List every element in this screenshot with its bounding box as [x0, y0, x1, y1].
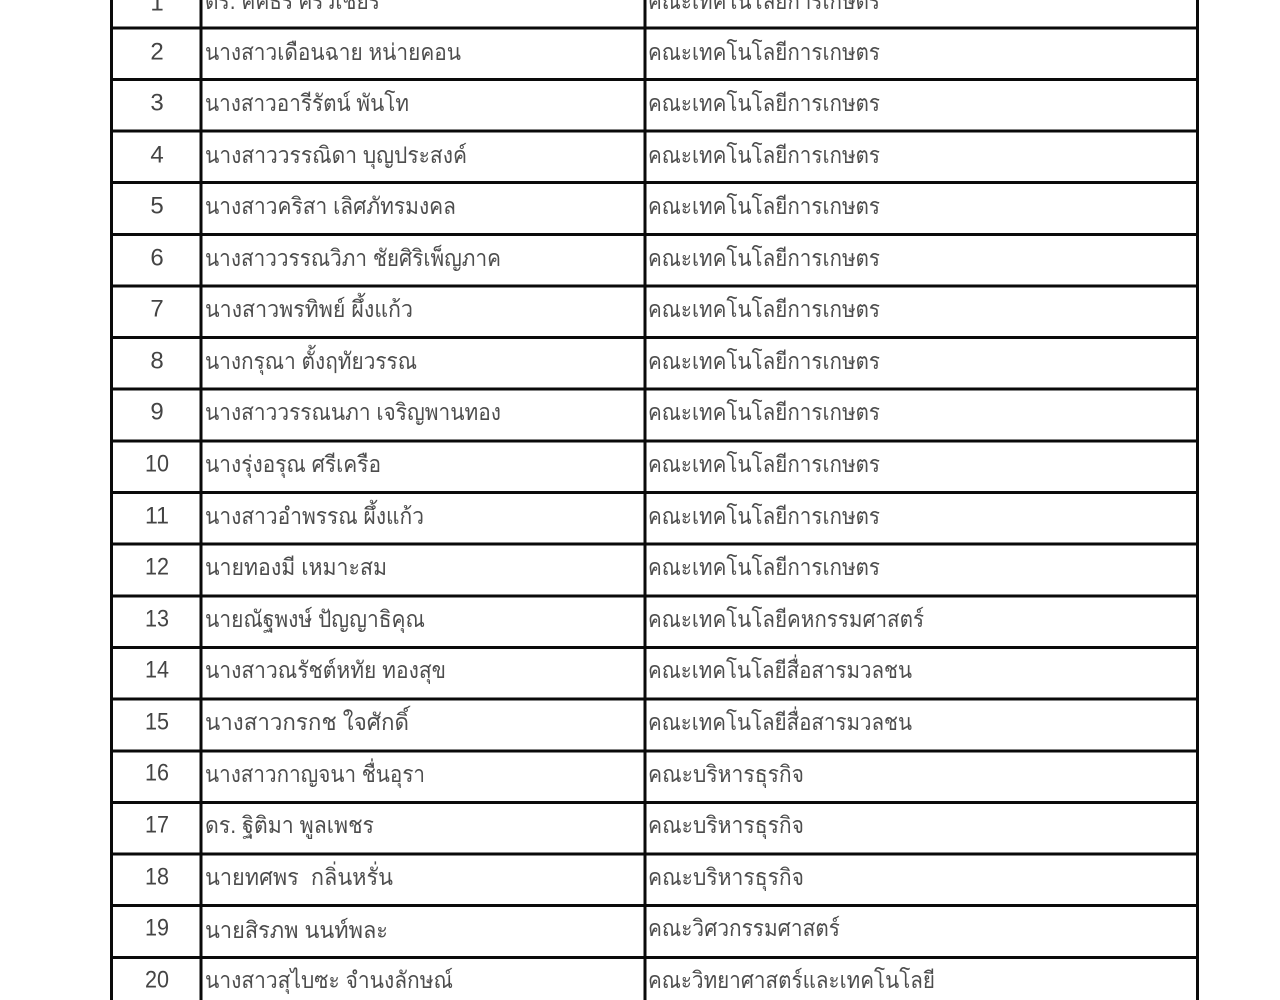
row 2: นางสาวเดือนฉาย หน่ายคอน — [205, 39, 461, 65]
row 7: 7 — [150, 296, 164, 322]
row 12: 12 — [145, 554, 169, 580]
row 13: 13 — [145, 606, 169, 632]
row 9: 9 — [150, 398, 164, 426]
row 17: คณะบริหารธุรกิจ — [648, 812, 804, 839]
row 14: นางสาวณรัชต์หทัย ทองสุข — [205, 657, 446, 684]
row 15 — [145, 705, 912, 736]
row 20 — [145, 966, 935, 994]
row 3: คณะเทคโนโลยีการเกษตร — [648, 90, 880, 116]
row 16: คณะบริหารธุรกิจ — [648, 761, 804, 788]
row 17: ดร. ฐิติมา พูลเพชร — [205, 812, 374, 839]
row 14: 14 — [145, 656, 169, 684]
row 5 — [150, 192, 880, 220]
row 18: คณะบริหารธุรกิจ — [648, 864, 804, 891]
row 5: คณะเทคโนโลยีการเกษตร — [648, 193, 880, 219]
row 6: นางสาววรรณวิภา ชัยศิริเพ็ญภาค — [205, 243, 501, 271]
row 11 — [145, 500, 880, 530]
row 10: 10 — [145, 450, 169, 478]
row 9: คณะเทคโนโลยีการเกษตร — [648, 399, 880, 425]
row 3 — [150, 90, 880, 116]
row 4 — [150, 142, 880, 169]
row 12: นายทองมี เหมาะสม — [205, 554, 387, 580]
row 8 — [150, 345, 880, 375]
row 2: 2 — [150, 38, 164, 66]
row 15: นางสาวกรกช ใจศักดิ์ — [205, 705, 411, 735]
row 16: นางสาวกาญจนา ชื่นอุรา — [205, 758, 425, 788]
row 10: นางรุ่งอรุณ ศรีเครือ — [205, 451, 381, 478]
row 8: คณะเทคโนโลยีการเกษตร — [648, 348, 880, 374]
row 19: คณะวิศวกรรมศาสตร์ — [648, 915, 840, 941]
row 2 — [150, 38, 880, 66]
row 9 — [150, 398, 880, 426]
row 17: 17 — [145, 812, 169, 838]
row 7 — [150, 293, 880, 322]
row 2: คณะเทคโนโลยีการเกษตร — [648, 39, 880, 65]
row 1 — [150, 0, 880, 16]
row 6: 6 — [150, 244, 164, 272]
row 10 — [145, 450, 880, 478]
row 3: 3 — [150, 90, 164, 116]
row 3: นางสาวอารีรัตน์ พันโท — [205, 90, 409, 116]
row 11: นางสาวอำพรรณ ผึ้งแก้ว — [205, 500, 424, 529]
row 7: คณะเทคโนโลยีการเกษตร — [648, 296, 880, 322]
row 20: นางสาวสุไบซะ จำนงลักษณ์ — [205, 967, 453, 994]
row 4: คณะเทคโนโลยีการเกษตร — [648, 142, 880, 168]
row 17 — [145, 812, 804, 839]
row 5: นางสาวคริสา เลิศภัทรมงคล — [205, 193, 456, 219]
row 13: คณะเทคโนโลยีคหกรรมศาสตร์ — [648, 606, 924, 632]
row 6: คณะเทคโนโลยีการเกษตร — [648, 245, 880, 271]
row 8: นางกรุณา ตั้งฤทัยวรรณ — [205, 345, 417, 375]
row 8: 8 — [150, 348, 164, 374]
row 10: คณะเทคโนโลยีการเกษตร — [648, 451, 880, 477]
row 18: 18 — [145, 864, 169, 890]
row 9: นางสาววรรณนภา เจริญพานทอง — [205, 399, 501, 425]
row 15: คณะเทคโนโลยีสื่อสารมวลชน — [648, 706, 912, 735]
row 20: 20 — [145, 966, 169, 994]
row 20: คณะวิทยาศาสตร์และเทคโนโลยี — [648, 967, 935, 993]
row 16 — [145, 758, 804, 788]
row 14: คณะเทคโนโลยีสื่อสารมวลชน — [648, 654, 912, 683]
row 13: นายณัฐพงษ์ ปัญญาธิคุณ — [205, 606, 425, 633]
row 16: 16 — [145, 760, 169, 786]
row 7: นางสาวพรทิพย์ ผึ้งแก้ว — [205, 293, 413, 322]
row 5: 5 — [150, 192, 164, 220]
row 13 — [145, 606, 924, 633]
row 18 — [145, 861, 804, 891]
row 19 — [145, 914, 840, 943]
row 19: นายสิรภพ นนท์พละ — [205, 917, 388, 943]
row 11: คณะเทคโนโลยีการเกษตร — [648, 503, 880, 529]
row 14 — [145, 654, 912, 684]
row 12: คณะเทคโนโลยีการเกษตร — [648, 554, 880, 580]
row 6 — [150, 243, 880, 272]
row 4: 4 — [150, 142, 164, 168]
row 11: 11 — [145, 502, 169, 530]
row 12 — [145, 554, 880, 580]
row 15: 15 — [145, 708, 169, 736]
row 19: 19 — [145, 914, 169, 942]
row 4: นางสาววรรณิดา บุญประสงค์ — [205, 142, 467, 169]
row 18: นายทศพร กลิ่นหรั่น — [205, 861, 393, 890]
